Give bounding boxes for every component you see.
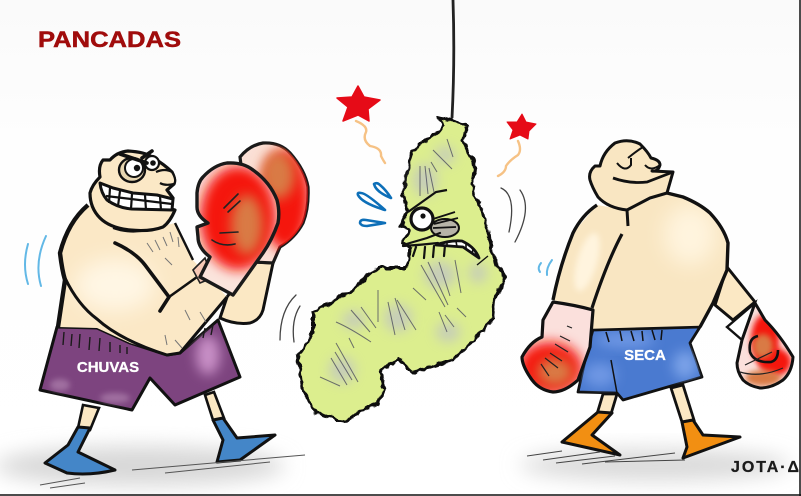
star small <box>507 114 536 139</box>
squiggle right <box>498 141 520 176</box>
ground shadow right <box>520 449 790 481</box>
speed lines <box>527 451 685 464</box>
nose <box>156 170 175 185</box>
legs <box>597 385 694 422</box>
label chuvas: CHUVAS <box>77 359 139 376</box>
eyes <box>119 151 159 182</box>
bruises <box>329 146 487 383</box>
motion lines left of boxer <box>539 260 552 275</box>
gritted mouth <box>436 241 479 258</box>
right glove <box>727 303 793 388</box>
boxer: chuvas <box>25 143 309 488</box>
wrist strap <box>193 258 212 283</box>
head <box>90 151 175 232</box>
map body <box>298 117 505 422</box>
nose and moustache <box>403 233 445 258</box>
socks <box>45 418 275 474</box>
speed lines <box>40 455 305 488</box>
ground shadow left <box>0 446 285 486</box>
rope <box>452 0 454 118</box>
right arm <box>715 267 755 320</box>
head <box>590 141 673 226</box>
sweat drops <box>358 183 391 226</box>
bruise hatch lines <box>320 139 466 386</box>
star large <box>337 86 380 121</box>
legs <box>78 392 224 430</box>
torso <box>58 205 227 355</box>
black eye <box>431 212 459 237</box>
map character <box>298 117 505 422</box>
grin with teeth <box>100 183 173 210</box>
boxer: seca <box>518 141 793 464</box>
motion lines near map upper right <box>501 188 525 242</box>
torso and left arm <box>553 193 728 330</box>
back glove <box>240 143 309 263</box>
label seca: SECA <box>624 347 666 364</box>
back arm <box>220 262 273 323</box>
chin fold <box>113 228 147 232</box>
boots <box>562 412 740 458</box>
motion lines left of boxer <box>25 236 46 286</box>
open eye <box>411 208 433 230</box>
shorts <box>578 327 702 400</box>
shorts <box>40 320 240 410</box>
title: PANCADAS <box>38 27 181 52</box>
angry brow <box>408 190 447 212</box>
motion lines near map lower left <box>280 295 300 342</box>
signature: JOTA·Δ <box>731 459 799 476</box>
left glove <box>518 302 593 394</box>
squiggle left <box>356 121 385 163</box>
front glove <box>197 163 279 295</box>
